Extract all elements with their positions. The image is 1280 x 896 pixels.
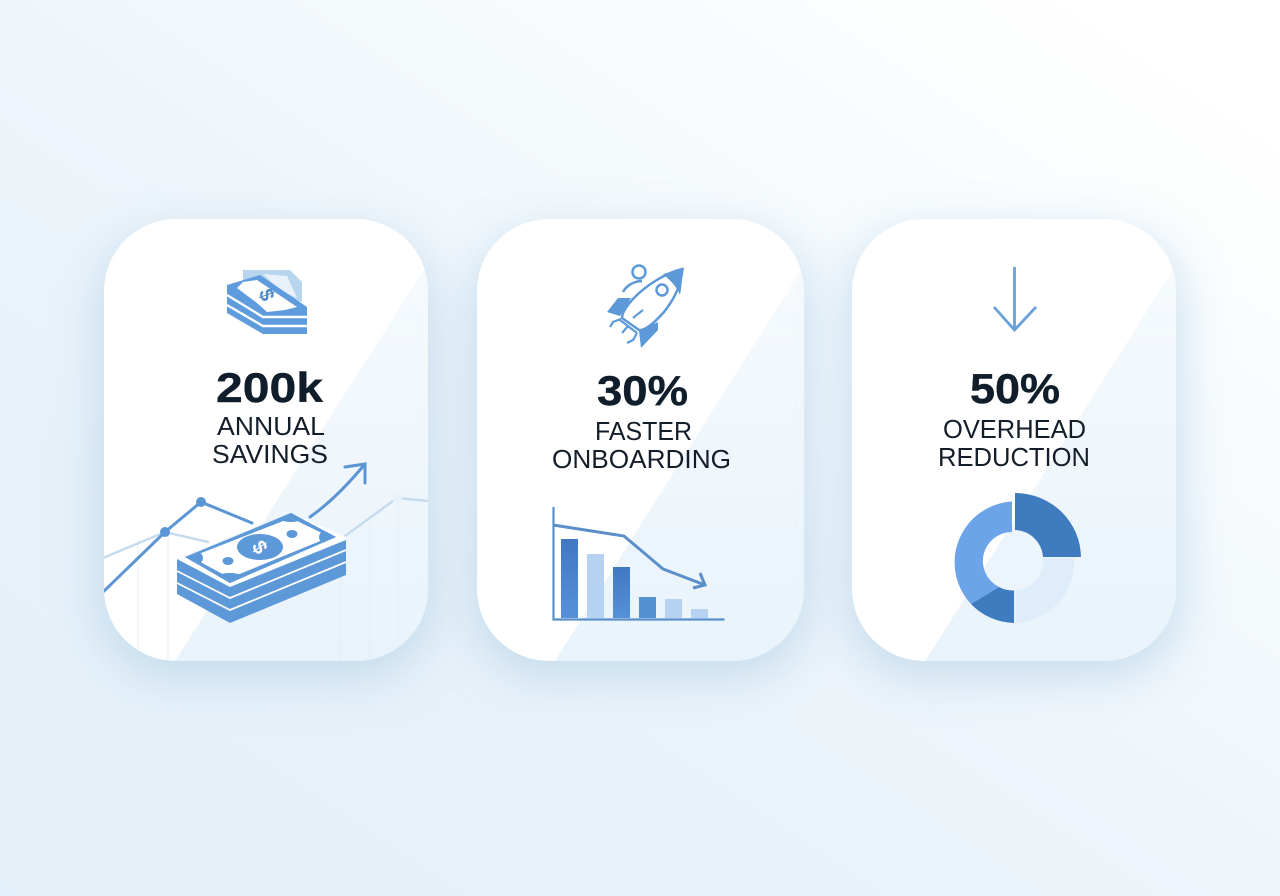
label: annual savings: ANNUAL (217, 413, 325, 441)
icon: large money stack: $ (247, 537, 271, 558)
icon: down arrow (994, 267, 1036, 330)
label: annual savings: SAVINGS (212, 441, 328, 469)
icon: large money stack (173, 506, 349, 623)
panel: overhead reduction (848, 219, 1180, 676)
label: faster onboarding (552, 418, 731, 474)
label: overhead reduction: OVERHEAD (943, 416, 1086, 444)
label: overhead reduction: REDUCTION (938, 444, 1090, 472)
metric: 200k: 200k (216, 364, 324, 411)
label: faster onboarding: FASTER (595, 418, 692, 446)
icon: rocket (607, 266, 682, 348)
label: annual savings (212, 413, 328, 469)
label: overhead reduction (938, 416, 1090, 472)
label: faster onboarding: ONBOARDING (552, 446, 731, 474)
background line chart (103, 464, 428, 661)
bar chart: declining onboarding time (553, 507, 724, 620)
panel: faster onboarding (473, 219, 808, 676)
icon: small money stack: $ (254, 286, 278, 304)
metric: 50%: 50% (970, 365, 1060, 412)
panel: annual savings (100, 219, 432, 676)
donut chart (955, 493, 1081, 623)
metric: 30%: 30% (597, 367, 688, 414)
icon: small money stack (227, 270, 307, 334)
